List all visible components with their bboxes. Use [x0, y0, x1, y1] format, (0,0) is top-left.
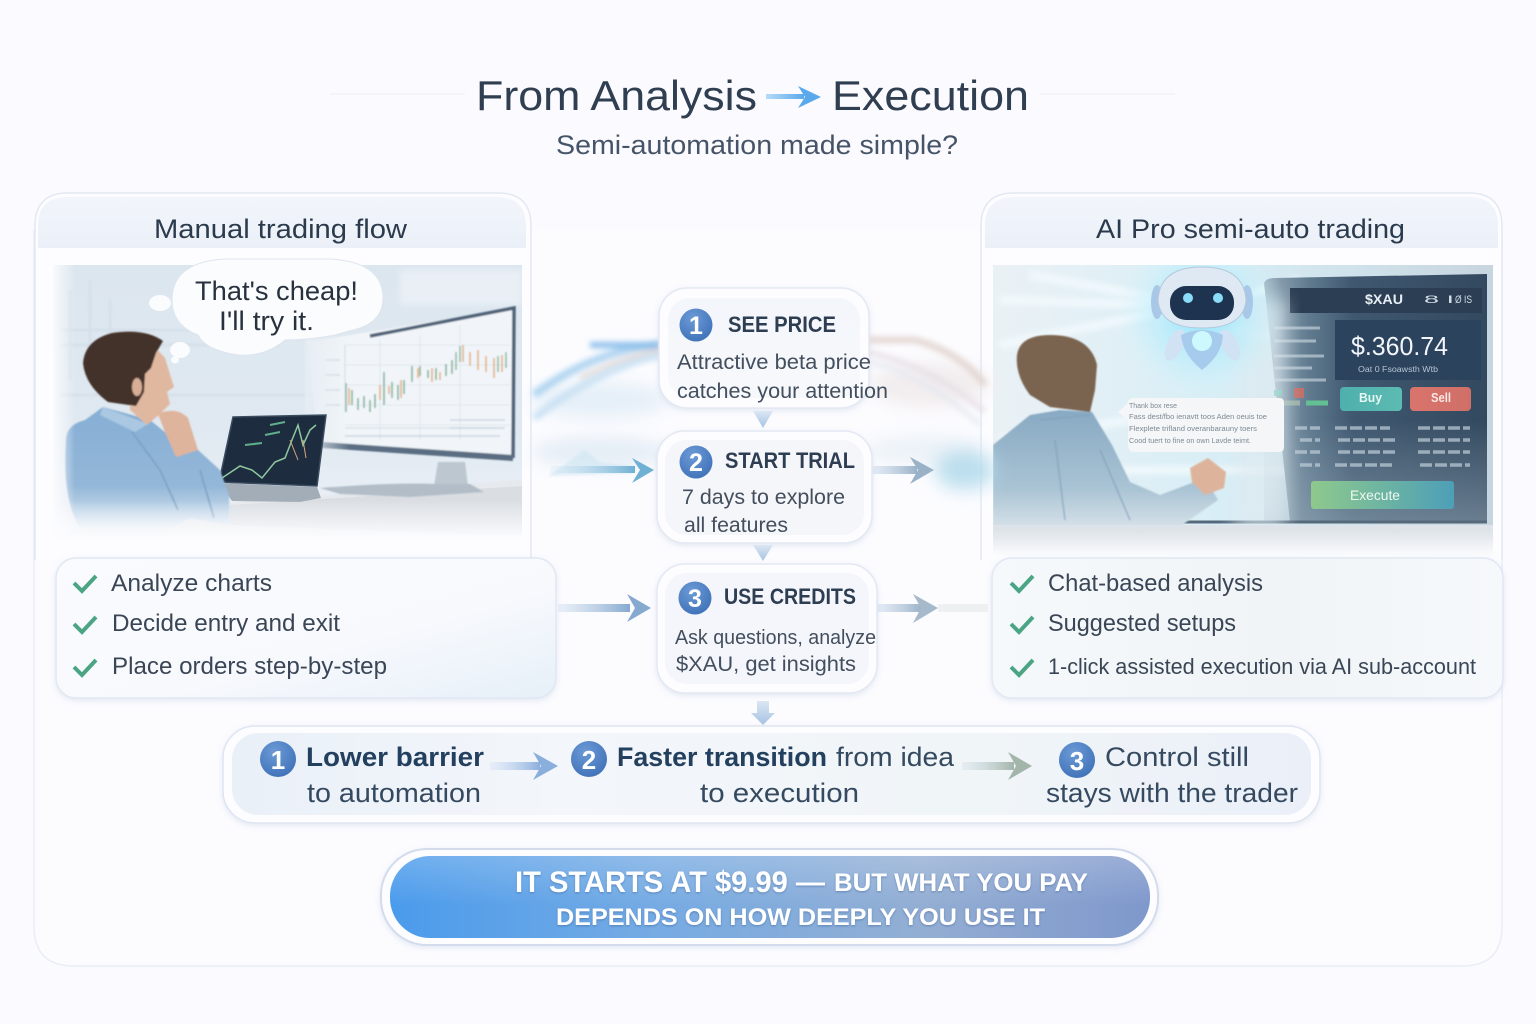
- fade on screen's left: [1235, 300, 1285, 530]
- list box: AI steps: [992, 558, 1503, 698]
- check 3: [74, 660, 96, 675]
- benefit 3: 3: [1070, 746, 1084, 776]
- number badge 2: [680, 446, 712, 478]
- trading dashboard screen: [1180, 274, 1487, 522]
- arrow: step 1 to 2: [753, 411, 773, 428]
- benefit 3: [1046, 742, 1298, 808]
- laptop: [219, 415, 326, 502]
- arrow: into step 2: [548, 450, 654, 483]
- check 2: [74, 617, 96, 632]
- number badge 2: 2: [689, 449, 703, 477]
- step 1 heading: SEE PRICE: [728, 312, 836, 337]
- panel header band: [985, 197, 1498, 248]
- item 1: Analyze charts: [111, 570, 272, 597]
- illustration: trader with AI robot and dashboard: [993, 265, 1493, 550]
- benefit 3: stays with the trader: [1046, 778, 1298, 808]
- bubble text line 1: That's cheap!: [195, 276, 358, 306]
- arrow: step 2 to 3: [753, 545, 773, 561]
- trading dashboard screen: Oat 0 Fsoawsth Wtb: [1358, 365, 1439, 374]
- benefits bar: [223, 726, 1320, 823]
- trading dashboard screen: Sell: [1431, 390, 1451, 405]
- panel heading: Manual trading flow: [154, 214, 408, 244]
- trading dashboard screen: $.360.74: [1351, 331, 1448, 361]
- number badge 3: 3: [688, 585, 702, 613]
- step 3 heading: USE CREDITS: [724, 584, 856, 609]
- CTA line 2: DEPENDS ON HOW DEEPLY YOU USE IT: [556, 904, 1045, 931]
- number badge 1: 1: [689, 312, 703, 340]
- benefit 2: 2: [582, 745, 596, 775]
- chat bubble: Cood tuert to fine on own Lavde teimt.: [1129, 438, 1251, 445]
- step 3 text line 1: Ask questions, analyze: [675, 627, 876, 649]
- number badge 1: [680, 308, 712, 342]
- step 2: start trial: [657, 431, 872, 543]
- step 3: use credits: [657, 564, 877, 693]
- call to action pill: [381, 849, 1158, 945]
- benefit 2: from idea: [836, 742, 955, 772]
- panel: AI Pro semi-auto trading: [981, 193, 1503, 698]
- panel card: [35, 193, 531, 560]
- step 1 text line 2: catches your attention: [677, 380, 888, 403]
- number badge 3: [678, 582, 712, 614]
- trading dashboard screen: $XAU: [1365, 291, 1403, 307]
- panel heading: AI Pro semi-auto trading: [1096, 214, 1405, 244]
- CTA line 1: [515, 866, 1088, 899]
- benefit 1: Lower barrier: [306, 742, 485, 772]
- item 2: Suggested setups: [1048, 610, 1236, 637]
- trading dashboard screen: Buy: [1359, 390, 1383, 405]
- illustration: trader at desk with monitors: [53, 265, 522, 540]
- item 1: Chat-based analysis: [1048, 570, 1263, 597]
- panel card: [981, 193, 1502, 560]
- bubble text line 2: I'll try it.: [219, 306, 314, 336]
- trader figure: [65, 332, 230, 528]
- user figure: [993, 335, 1226, 530]
- arrow: into step 3: [558, 594, 651, 622]
- chat bubble: Thank box rese: [1129, 403, 1177, 410]
- benefit 1: to automation: [307, 778, 481, 808]
- trading dashboard screen: Ø IS: [1455, 294, 1472, 306]
- step 2 text line 2: all features: [684, 514, 788, 537]
- thought bubble: [149, 259, 383, 364]
- check 1: [74, 576, 96, 591]
- AI robot assistant: [1131, 265, 1278, 377]
- step 1: see price: [659, 288, 888, 408]
- title right word: Execution: [832, 72, 1029, 119]
- benefit 2: [571, 741, 955, 808]
- step 2 text line 1: 7 days to explore: [682, 486, 845, 509]
- item 2: Decide entry and exit: [112, 610, 340, 637]
- CTA line 1: BUT WHAT YOU PAY: [834, 869, 1088, 897]
- trading dashboard screen: 8 I: [1424, 294, 1454, 306]
- step 1 text line 1: Attractive beta price: [677, 351, 871, 374]
- outer frame panel: [34, 230, 1502, 966]
- arrow: out of step 3: [877, 594, 988, 623]
- chat bubble: Flexplete trifland overanbarauny toers: [1129, 426, 1258, 433]
- benefit 1: 1: [271, 745, 285, 775]
- item 3: Place orders step-by-step: [112, 653, 387, 680]
- scene fades: [53, 500, 522, 540]
- check 1: [1011, 576, 1033, 591]
- subtitle: Semi-automation made simple?: [556, 130, 958, 160]
- step 2 heading: START TRIAL: [725, 448, 855, 473]
- check 3: [1011, 660, 1033, 675]
- title left words: From Analysis: [476, 72, 757, 119]
- flow streaks behind the steps: [530, 340, 995, 490]
- chat bubble: [1118, 398, 1284, 452]
- title arrow: [766, 86, 821, 108]
- trading dashboard screen: Execute: [1350, 487, 1400, 503]
- item 3: 1-click assisted execution via AI sub-account: [1048, 654, 1476, 679]
- benefit 2: Faster transition: [617, 742, 827, 772]
- arrow: out of step 2: [872, 457, 934, 484]
- CTA line 1: IT STARTS AT $9.99 —: [515, 866, 825, 899]
- arrow: steps to benefits: [751, 701, 775, 725]
- desktop monitor: [305, 308, 515, 497]
- arrow: benefit 1 to 2: [490, 752, 558, 780]
- title: [476, 72, 1029, 119]
- panel: manual trading flow: [35, 193, 556, 698]
- check 2: [1011, 617, 1033, 632]
- benefit 3: Control still: [1105, 742, 1249, 772]
- benefit 2: to execution: [700, 778, 859, 808]
- step 3 text line 2: $XAU, get insights: [676, 653, 856, 676]
- benefit 1: [260, 741, 485, 808]
- desk: [993, 525, 1493, 547]
- panel header band: [38, 197, 526, 248]
- chat bubble: Fass dest/fbo ienavtt toos Aden oeuis toe: [1129, 414, 1267, 421]
- list box: manual steps: [56, 558, 556, 698]
- arrow: benefit 2 to 3: [962, 752, 1032, 780]
